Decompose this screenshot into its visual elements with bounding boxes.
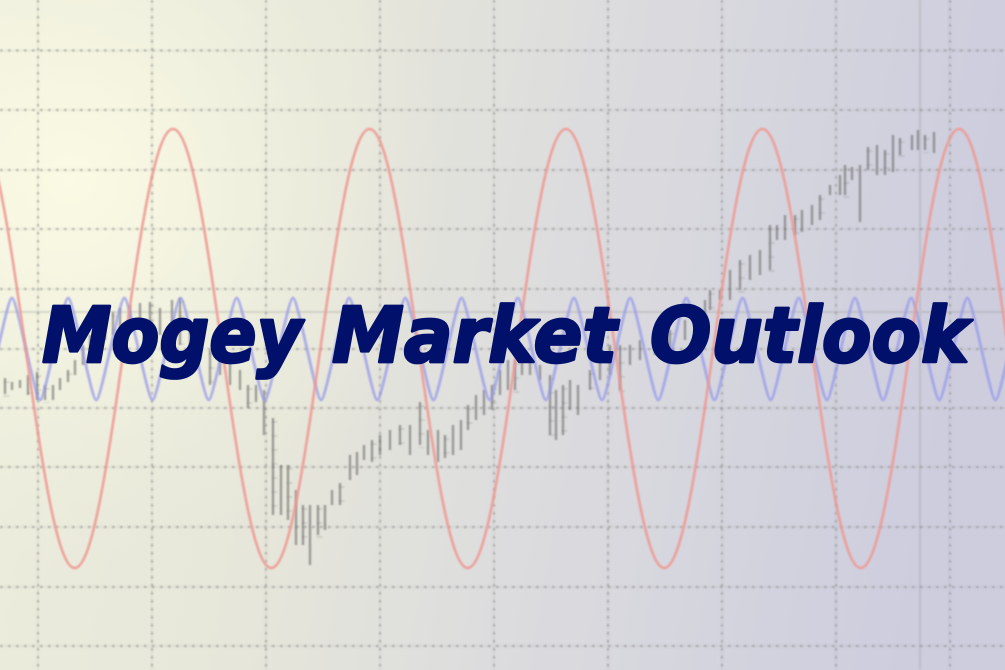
title: Market [332,292,620,381]
red slow sine wave [0,129,1005,568]
title [42,292,973,381]
title: Mogey [42,292,305,381]
price bars series [5,130,934,565]
title: Outlook [650,292,973,381]
blue fast sine wave [0,298,1005,400]
